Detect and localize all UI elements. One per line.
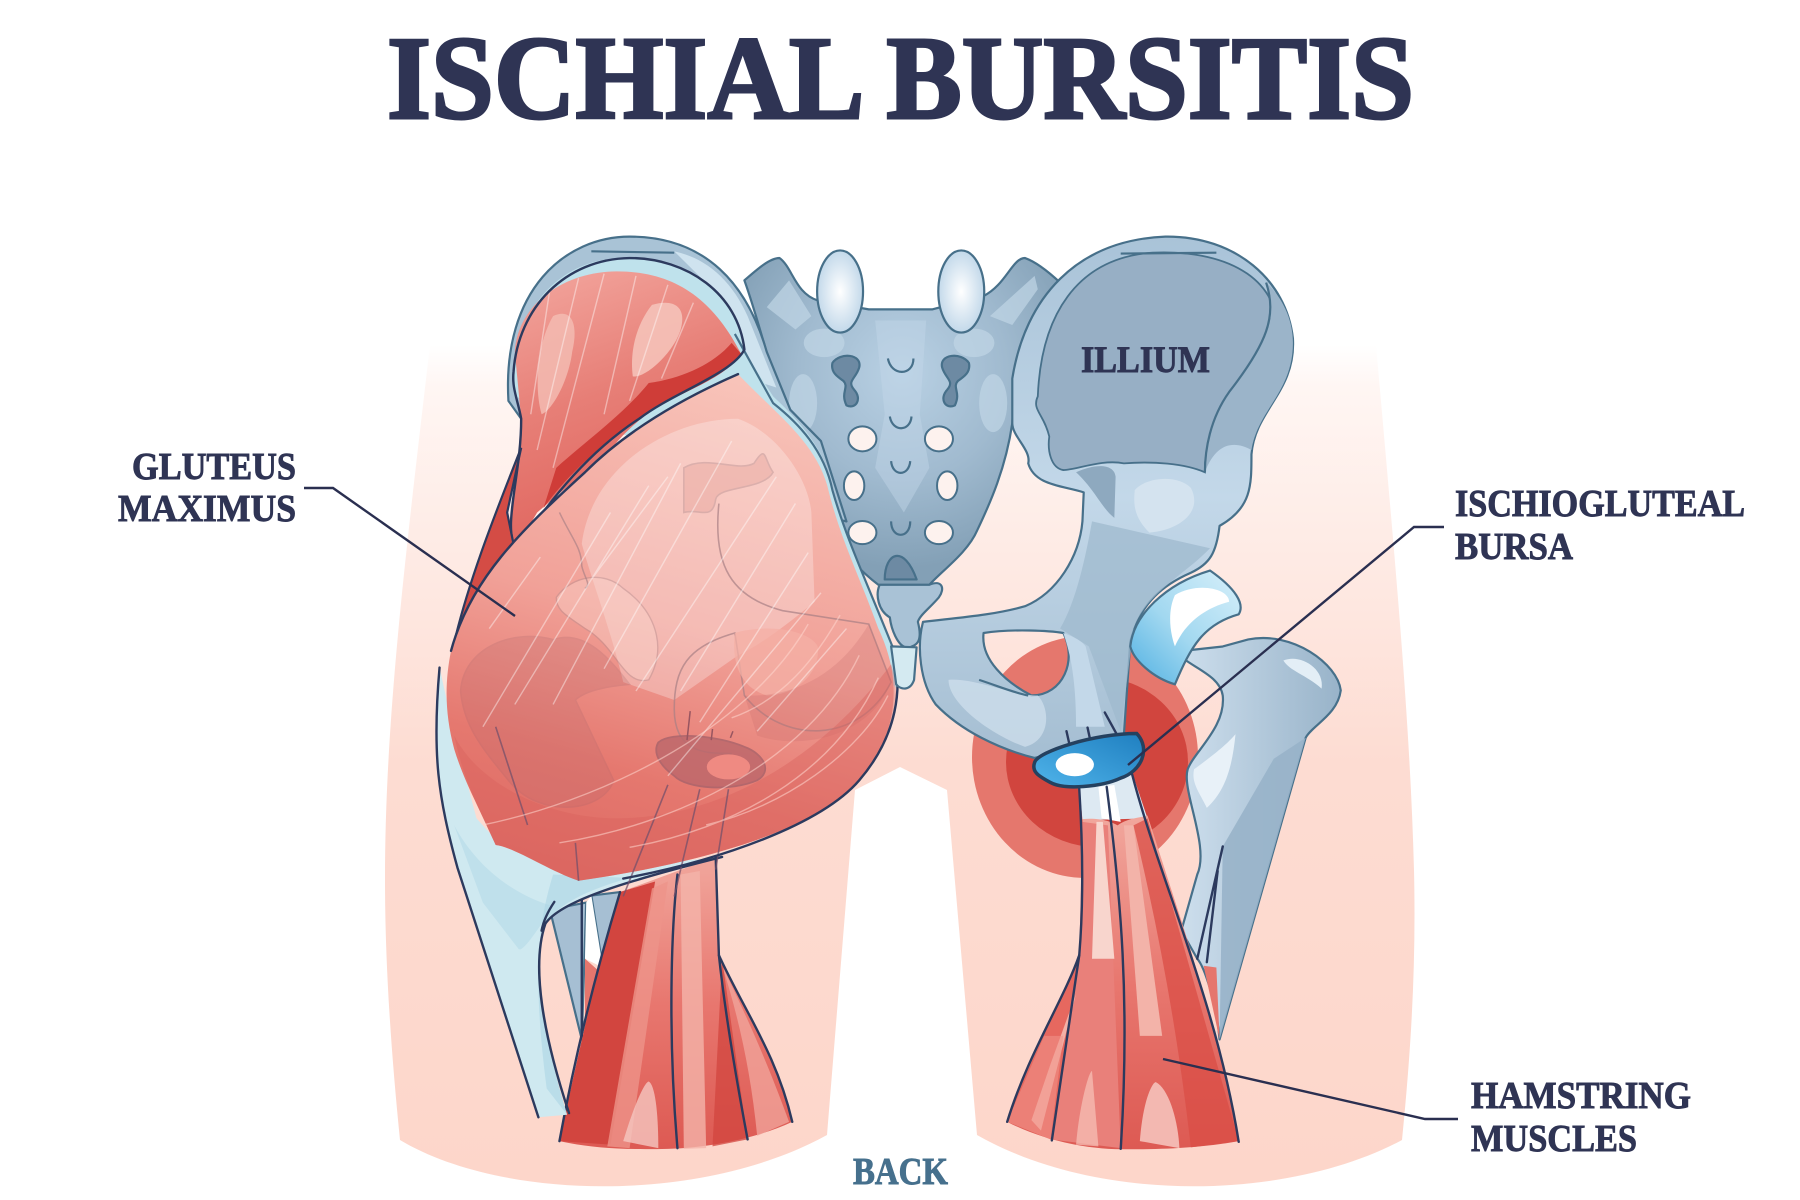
label: ischiogluteal bursa	[1455, 483, 1745, 568]
S-shaped dark grooves	[832, 356, 969, 406]
muscle body	[447, 374, 894, 881]
background: thigh silhouette	[385, 345, 1414, 1186]
label: ischiogluteal bursa: ISCHIOGLUTEAL	[1455, 483, 1745, 525]
sacrum tail fascia	[891, 646, 917, 689]
sacrum	[744, 258, 1060, 648]
left process	[817, 250, 863, 333]
gluteus medius	[510, 258, 744, 550]
inflammation zone	[972, 636, 1198, 878]
ghost of underlying bone	[582, 419, 815, 700]
label: ischiogluteal bursa: BURSA	[1455, 526, 1574, 568]
label: gluteus maximus: GLUTEUS	[132, 446, 296, 488]
femoral head cartilage	[1130, 571, 1241, 684]
bursa highlight	[1056, 753, 1094, 776]
ischium ghost	[656, 736, 765, 787]
muscle fibres	[483, 441, 846, 776]
leader line: gluteus maximus	[304, 488, 515, 616]
label: hamstring muscles	[1471, 1075, 1691, 1160]
left thigh fascia	[436, 668, 722, 1117]
gluteus maximus	[447, 374, 898, 896]
dark band right of iliac crest line	[1205, 283, 1293, 472]
muscle outline	[451, 374, 738, 651]
left thigh gluteal red strip	[452, 448, 521, 651]
inner inflammation core	[1006, 677, 1188, 847]
label: gluteus maximus	[118, 446, 296, 530]
sacral foramina	[844, 426, 957, 544]
title: ISCHIAL BURSITIS	[387, 12, 1414, 144]
ischiogluteal bursa	[1034, 712, 1144, 787]
label: hamstring muscles: HAMSTRING	[1471, 1075, 1691, 1117]
left hamstring muscles	[559, 857, 792, 1149]
right hip bone: ilium and ischium	[920, 237, 1293, 758]
label: back view: BACK	[853, 1151, 948, 1193]
leader line: ischiogluteal bursa	[1128, 527, 1444, 765]
left hip bone band	[508, 237, 846, 521]
darker lower band	[454, 664, 896, 881]
left femur behind	[550, 892, 620, 1039]
right hamstring muscles	[1007, 773, 1239, 1149]
bursa sac	[1034, 733, 1144, 787]
outer inflammation ring	[972, 636, 1198, 878]
sacral processes	[817, 250, 984, 333]
gluteus medius outline	[511, 258, 744, 550]
label: hamstring muscles: MUSCLES	[1471, 1118, 1637, 1160]
iliac fossa shading	[1036, 252, 1277, 472]
leader line: hamstring muscles	[1163, 1059, 1458, 1119]
coccyx	[878, 583, 942, 648]
bone outline	[920, 237, 1293, 758]
tendon	[1079, 773, 1148, 820]
fascia beside gluteus	[515, 258, 899, 689]
label: gluteus maximus: MAXIMUS	[118, 488, 296, 530]
label: illium: ILLIUM	[1081, 340, 1210, 381]
right femur	[1175, 638, 1341, 1039]
right process	[938, 250, 984, 333]
